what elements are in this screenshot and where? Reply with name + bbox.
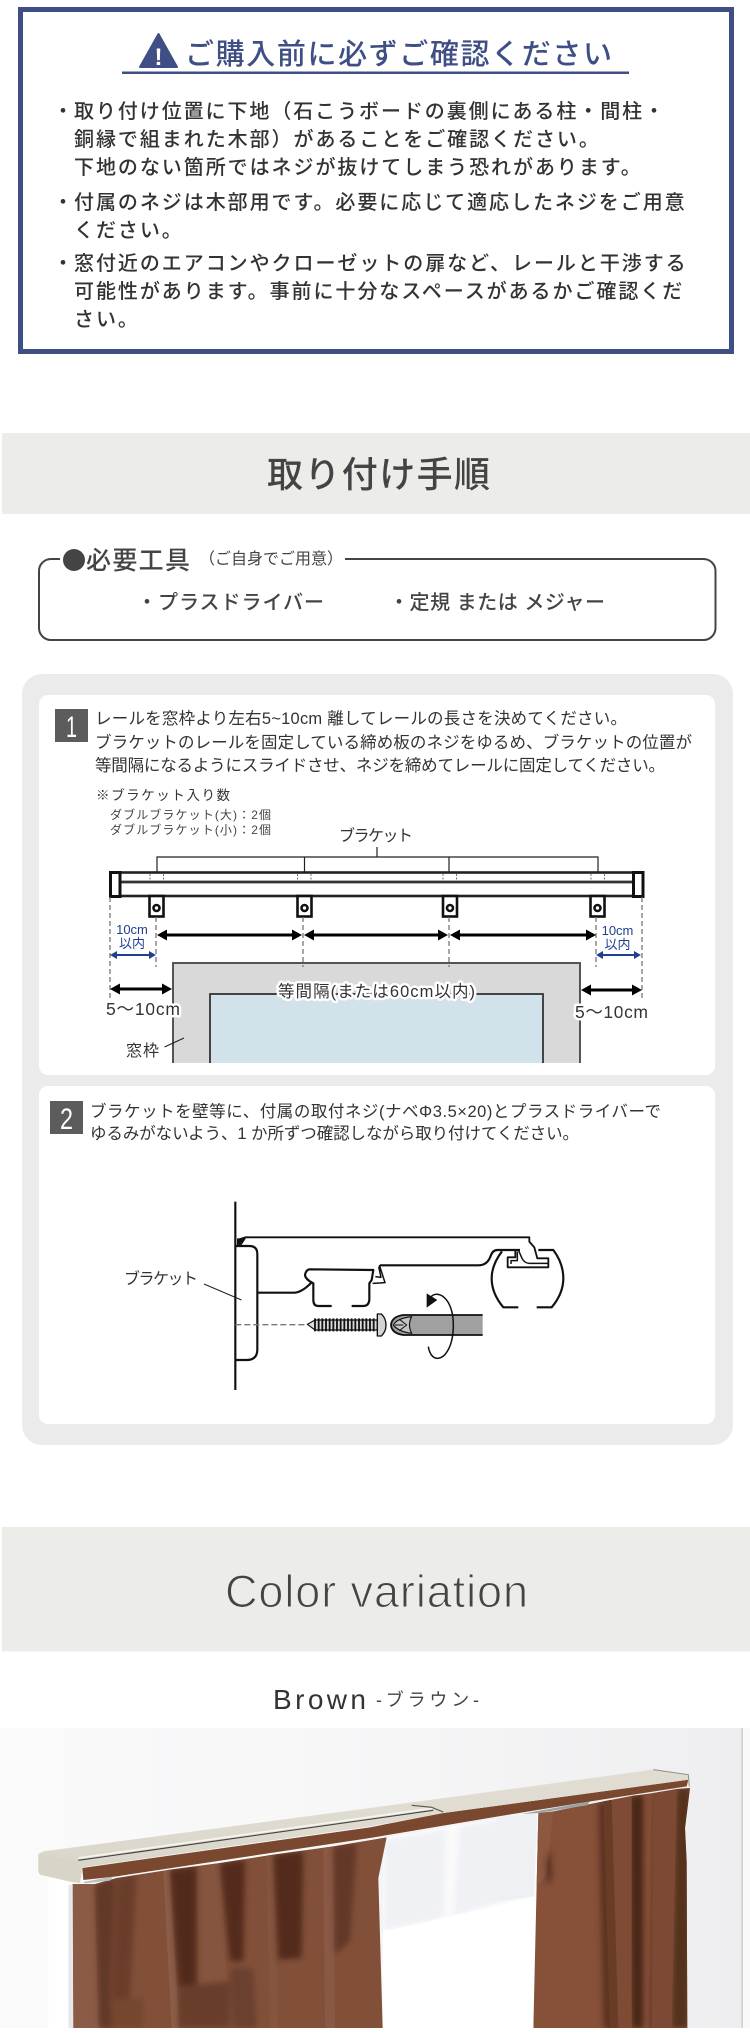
step 1 instructions <box>95 709 692 775</box>
notice bullet list: 取り付け位置に下地（石こうボードの裏側にある柱・間柱・ <box>74 100 666 123</box>
panel: step 2 <box>39 1086 715 1424</box>
step 1 number badge <box>55 709 88 744</box>
color name heading <box>273 1684 479 1715</box>
blue limit labels: 10cm <box>602 923 633 938</box>
tool: ruler or tape measure: ・定規 または メジャー <box>389 591 605 614</box>
rail highlight <box>78 1808 433 1858</box>
bracket quantity note: ダブルブラケット(小)：2個 <box>110 822 271 837</box>
legend gap <box>60 552 345 566</box>
blue limit arrows <box>110 951 641 959</box>
tools heading note: （ご自身でご用意） <box>199 550 343 568</box>
window frame <box>172 962 581 1063</box>
screw <box>307 1314 386 1336</box>
color name heading: Brown <box>273 1684 366 1715</box>
notice bullet list: ・ <box>53 253 75 275</box>
mounting brackets <box>150 896 604 916</box>
icon: warning triangle <box>140 34 177 71</box>
notice bullet list: ・ <box>53 101 75 123</box>
step 1 instructions: ブラケットのレールを固定している締め板のネジをゆるめ、ブラケットの位置が <box>95 732 692 752</box>
chart: rail layout diagram <box>106 827 647 1063</box>
bracket quantity note: ※ブラケット入り数 <box>96 787 230 803</box>
wall <box>232 1202 239 1390</box>
chart: bracket cross-section and screw <box>235 1202 563 1390</box>
step 1 instructions: 等間隔になるようにスライドさせ、ネジを締めてレールに固定してください。 <box>95 756 665 775</box>
small clip <box>373 1265 385 1283</box>
bracket leader line <box>204 1284 242 1300</box>
panel: purchase notice <box>20 10 732 352</box>
panel: steps background <box>22 674 733 1445</box>
notice bullet list: 窓付近のエアコンやクローゼットの扉など、レールと干渉する <box>74 252 688 275</box>
photo: brown curtain on rail <box>0 1728 750 2028</box>
step 2 instructions <box>90 1101 661 1143</box>
icon: warning triangle: ! <box>154 44 162 71</box>
carrier shell <box>492 1250 563 1307</box>
panel: required tools <box>39 547 716 640</box>
step 2 instructions: ブラケットを壁等に、付属の取付ネジ(ナベΦ3.5×20)とプラスドライバーで <box>90 1101 661 1121</box>
rail cream body <box>38 1770 689 1883</box>
step 2 instructions: ゆるみがないよう、1 か所ずつ確認しながら取り付けてください。 <box>90 1124 579 1143</box>
wall <box>0 1728 750 2028</box>
margin label right: 5～10cm <box>575 1002 648 1022</box>
step 2 number badge: 2 <box>60 1103 73 1136</box>
equal spacing arrows <box>110 930 642 996</box>
center sheer curtain <box>383 1811 540 2028</box>
rotation arrow <box>427 1293 453 1358</box>
screwdriver <box>391 1315 483 1335</box>
dashed guide lines <box>110 897 642 998</box>
blue limit labels: 以内 <box>119 936 145 951</box>
tools heading bullet <box>63 549 85 571</box>
blue limit labels <box>117 925 632 950</box>
notice bullet list: 付属のネジは木部用です。必要に応じて適応したネジをご用意 <box>74 191 687 214</box>
step 2 number badge <box>50 1101 83 1136</box>
left sheer <box>48 1878 74 2028</box>
bracket label: ブラケット <box>124 1269 198 1288</box>
window frame label: 窓枠 <box>126 1042 159 1060</box>
step 1 instructions: レールを窓枠より左右5~10cm 離してレールの長さを決めてください。 <box>95 709 627 728</box>
bracket label: ブラケット <box>339 826 413 845</box>
notice frame <box>20 10 732 352</box>
notice bullet list: 可能性があります。事前に十分なスペースがあるかご確認くだ <box>74 280 684 303</box>
curtain runner tape <box>522 1801 590 1814</box>
blue limit labels: 以内 <box>604 937 631 952</box>
notice bullet list: 下地のない箇所ではネジが抜けてしまう恐れがあります。 <box>74 156 643 179</box>
rail right section <box>412 1770 689 1813</box>
margin label left: 5～10cm <box>106 999 180 1019</box>
upper arm <box>380 1250 520 1265</box>
rail inner hook <box>511 1251 548 1264</box>
section header: color variation: Color variation <box>225 1566 528 1617</box>
bracket callout lines <box>157 847 598 872</box>
rail top profile <box>237 1237 548 1267</box>
mounting dashed guide <box>235 1323 307 1327</box>
tools box outline <box>39 559 716 640</box>
rail groove <box>78 1810 433 1860</box>
rail <box>110 872 643 896</box>
notice heading: ご購入前に必ずご確認ください <box>185 38 612 71</box>
window frame leader line <box>164 1038 184 1047</box>
lower arm <box>257 1282 312 1293</box>
panel: step 1 <box>39 695 715 1104</box>
window glass <box>209 993 544 1063</box>
notice bullet list: さい。 <box>74 309 140 331</box>
tool: plus screwdriver: ・プラスドライバー <box>137 591 324 614</box>
bracket quantity note: ダブルブラケット(大)：2個 <box>110 807 271 822</box>
left brown drape <box>67 1835 393 2028</box>
section header: installation steps: 取り付け手順 <box>267 454 490 495</box>
heading underline <box>122 72 629 74</box>
section header: installation steps <box>2 433 750 514</box>
rail end cap shade <box>38 1854 82 1883</box>
equal spacing label: 等間隔(または60cm以内) <box>278 982 475 1001</box>
lower carrier <box>305 1269 373 1306</box>
tools heading: 必要工具 <box>86 547 190 575</box>
wall corner <box>741 1728 743 2028</box>
rail corner hook <box>237 1239 245 1245</box>
wall plate <box>235 1246 257 1360</box>
rail end detail <box>653 1770 689 1786</box>
color name heading: -ブラウン- <box>376 1689 479 1710</box>
brown valance <box>82 1780 688 1880</box>
right brown drape <box>530 1785 693 2028</box>
step 1 number badge: 1 <box>66 711 77 744</box>
blue limit labels: 10cm <box>116 922 148 937</box>
section header: color variation <box>2 1527 750 1652</box>
notice bullet list <box>53 100 688 331</box>
bracket quantity note <box>96 787 271 837</box>
notice bullet list: ・ <box>53 192 75 214</box>
notice bullet list: 銅縁で組まれた木部）があることをご確認ください。 <box>74 128 601 151</box>
notice bullet list: ください。 <box>74 220 184 242</box>
rail joint <box>412 1805 443 1812</box>
